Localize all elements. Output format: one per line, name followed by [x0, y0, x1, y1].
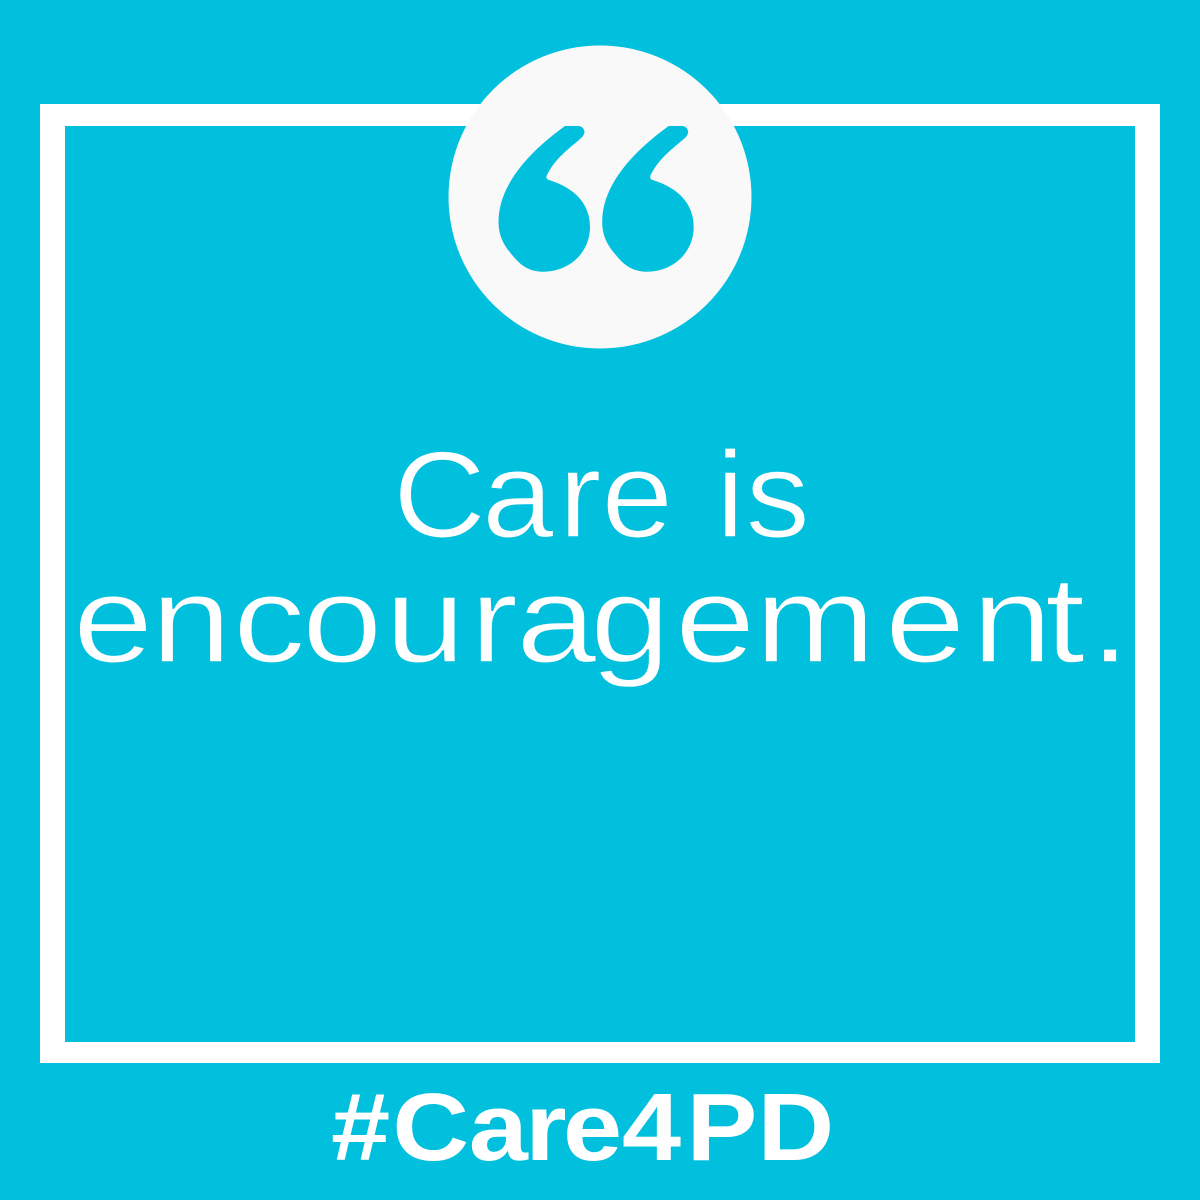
white frame — [40, 104, 1160, 1063]
quote text — [73, 426, 1130, 689]
icon: quotation mark badge — [448, 46, 752, 348]
hashtag: #Care4PD — [331, 1074, 834, 1181]
quote text: encouragement. — [73, 552, 1130, 689]
quote text: Care is — [393, 426, 810, 563]
